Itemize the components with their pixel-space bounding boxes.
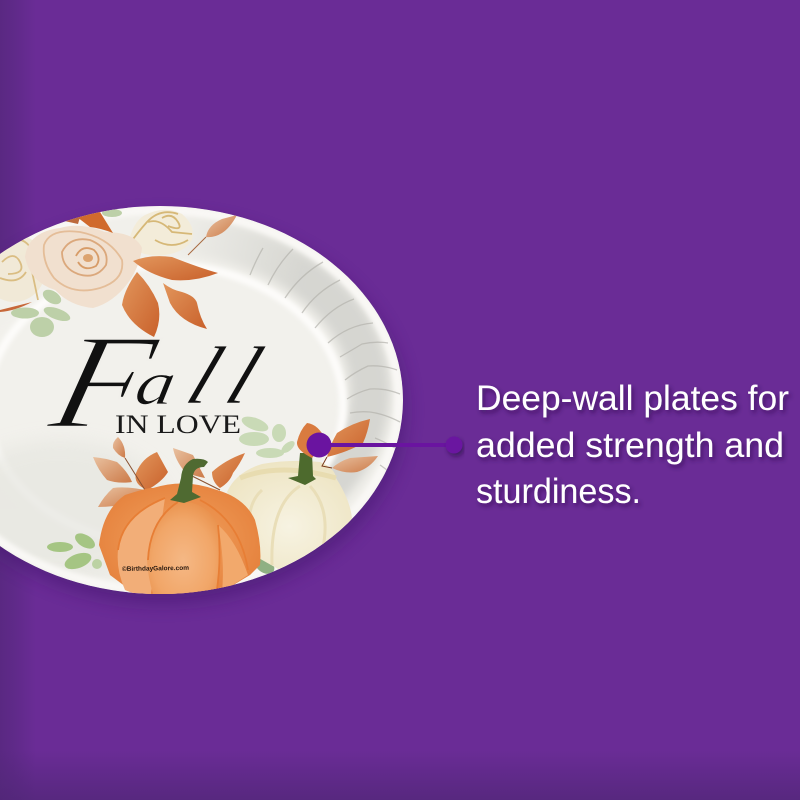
rose: large [25, 226, 142, 308]
rose: top [128, 210, 193, 256]
title: Fall: F [38, 308, 169, 457]
plate rim highlight [0, 210, 399, 590]
white pumpkin [227, 453, 352, 570]
callout text: Deep-wall plates for [476, 379, 789, 418]
callout dot on plate [306, 432, 332, 458]
callout text: added strength and [476, 426, 784, 465]
green leaves: top cluster [11, 209, 122, 337]
autumn leaves: top cluster [0, 212, 237, 337]
callout connector [306, 432, 462, 458]
title: Fall [47, 340, 266, 426]
subtitle: IN LOVE: IN LOVE [115, 410, 241, 439]
autumn leaves: right cluster [297, 419, 378, 472]
plate wall shading [208, 226, 392, 498]
callout text [476, 379, 789, 511]
white pumpkin stem [288, 453, 316, 485]
orange pumpkin [99, 459, 260, 600]
green leaves: lower [47, 414, 297, 577]
plate rim ribs [250, 248, 400, 473]
orange pumpkin stem [170, 459, 208, 503]
title: Fall: l [215, 331, 274, 421]
autumn leaves: lower left [93, 437, 245, 507]
plate well highlight [0, 262, 348, 467]
callout text: sturdiness. [476, 472, 641, 511]
title: Fall: a [131, 350, 181, 418]
plate shadow [0, 216, 406, 604]
rose: left [0, 237, 42, 302]
copyright: ©BirthdayGalore.com [122, 564, 189, 573]
plate [0, 206, 403, 600]
callout end dot [446, 436, 462, 454]
title: Fall: l [176, 331, 235, 421]
